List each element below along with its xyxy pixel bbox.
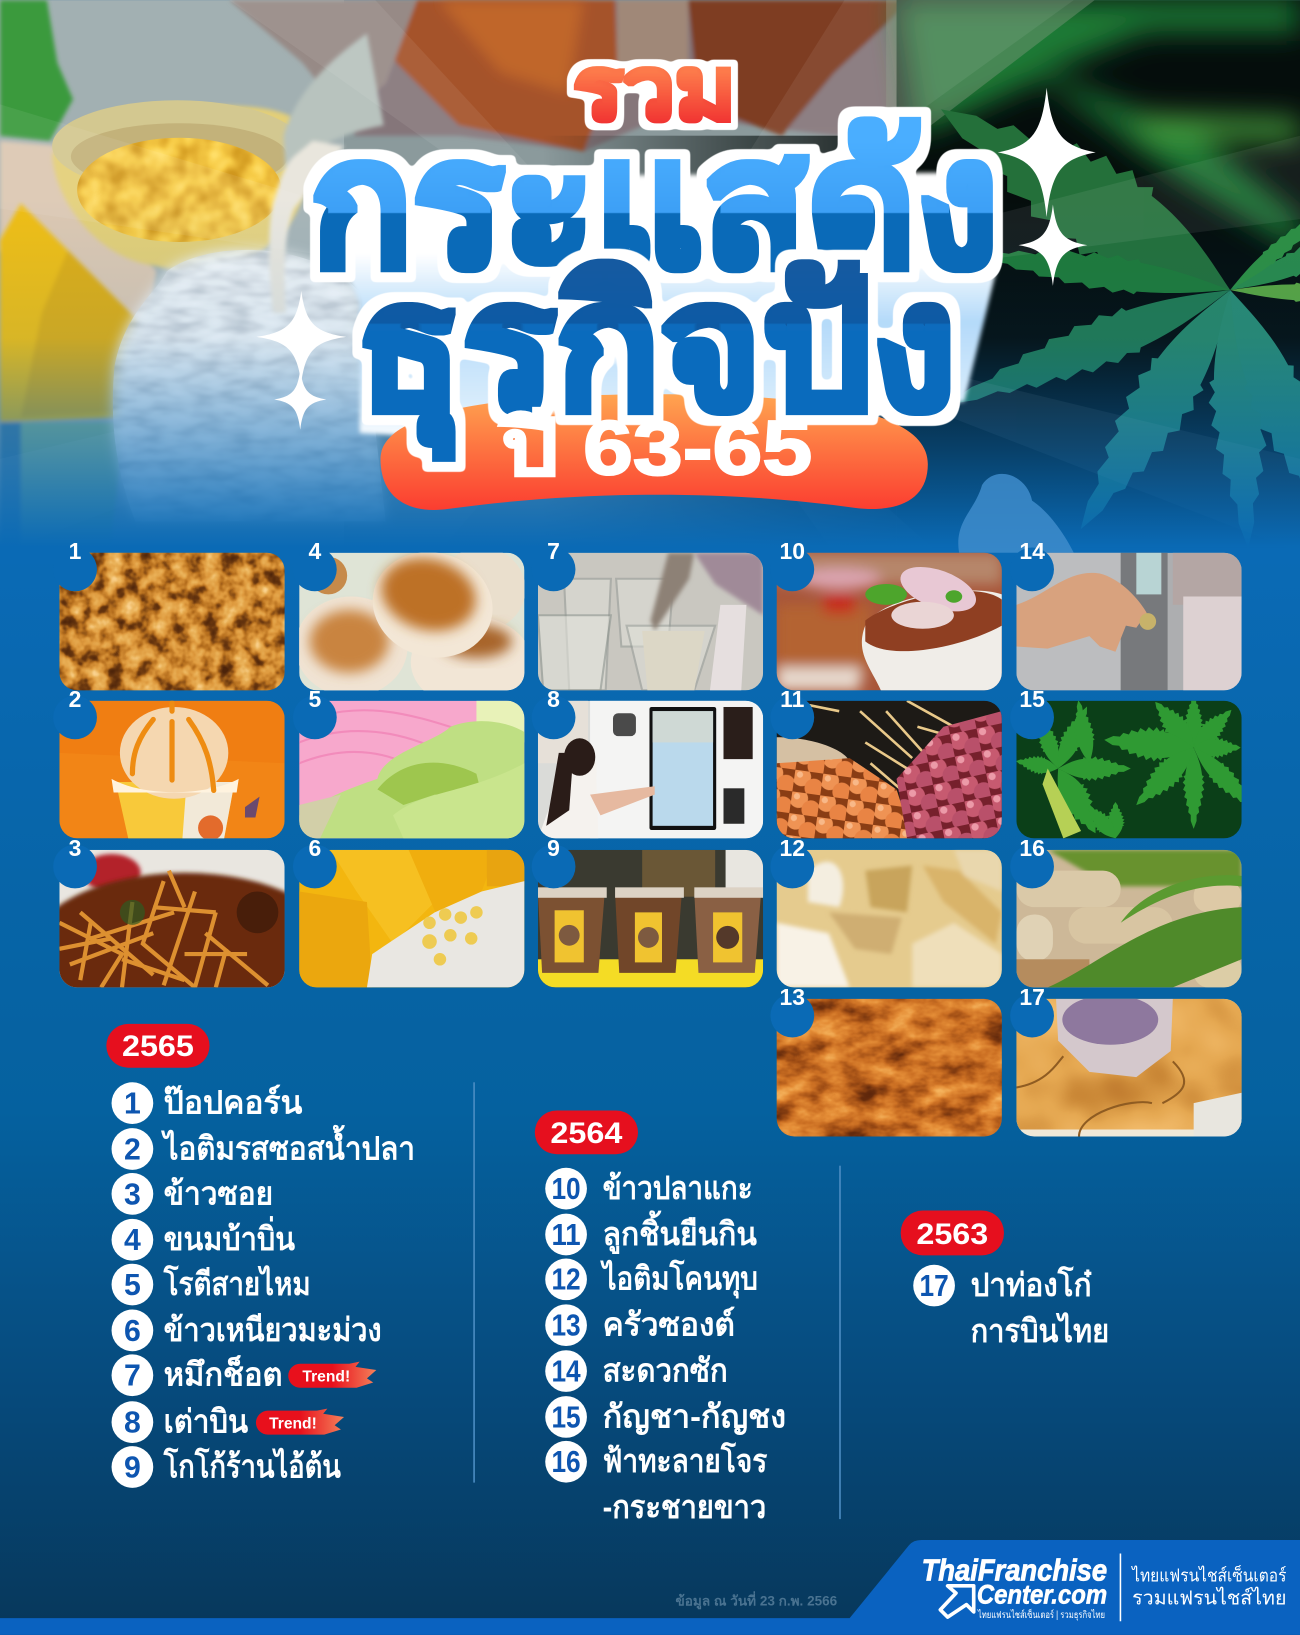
icon: logo arrow [940, 1586, 974, 1617]
item 9: โกโก้ร้านไอ้ต้น [163, 1446, 341, 1484]
item 1: 1 [124, 1088, 141, 1121]
tile 8: tao bin vending machine: 8 [547, 686, 560, 712]
item 16 [545, 1441, 768, 1525]
tile 7: hmuk shot glasses [532, 538, 763, 690]
item 4 [112, 1216, 295, 1261]
tile 12: broken cone ice cream: 12 [780, 835, 805, 861]
trend badge 7 [288, 1362, 376, 1388]
tile 6: mango sticky rice: 6 [308, 835, 321, 861]
item 17 [913, 1265, 1109, 1349]
decorative cloud [958, 474, 1074, 553]
item 11: ลูกชิ้นยืนกิน [603, 1210, 757, 1255]
tile 15: cannabis leaves [1010, 686, 1265, 844]
year pill 2564: 2564 [550, 1118, 623, 1150]
item 17: การบินไทย [971, 1312, 1109, 1349]
cannabis leaf [915, 67, 1300, 550]
photo: green leaf [0, 0, 73, 141]
logo wordmark: Center.com [977, 1579, 1107, 1610]
item 17: 17 [919, 1270, 949, 1303]
item 6 [112, 1310, 382, 1351]
photo: cassava roots [229, 0, 938, 151]
year pill 2564 [535, 1110, 638, 1154]
tile 9: cocoa cups: 9 [547, 835, 560, 861]
photo grid [28, 538, 1265, 1137]
logo wordmark [922, 1555, 1107, 1621]
sparkles [256, 88, 1096, 430]
item 13 [545, 1304, 735, 1346]
item 8: 8 [124, 1407, 141, 1440]
item 3 [112, 1173, 273, 1215]
year pill 2563 [901, 1211, 1004, 1255]
item 3: 3 [124, 1178, 141, 1211]
year pill 2565 [106, 1024, 210, 1068]
item 13: 13 [551, 1310, 581, 1343]
item 17: ปาท่องโก๋ [971, 1265, 1091, 1303]
item 4: ขนมบ้าบิ่น [164, 1216, 295, 1257]
tile 4: rice cakes: 4 [308, 538, 321, 564]
item 6: 6 [124, 1315, 141, 1348]
photo: mango slices [0, 203, 141, 553]
tile 2: ice cream: 2 [69, 686, 81, 712]
item 2: 2 [124, 1133, 141, 1166]
tile 13: croissants: 13 [780, 984, 805, 1010]
list: year 2565 [106, 1024, 415, 1488]
item 14: 14 [551, 1355, 581, 1388]
year pill 2565: 2565 [122, 1031, 194, 1063]
item 15 [545, 1396, 786, 1438]
tile 5: roti sai mai: 5 [308, 686, 321, 712]
item 11: 11 [551, 1219, 581, 1252]
tile 3: khao soi: 3 [69, 835, 81, 861]
tile 14: coin in machine: 14 [1019, 538, 1045, 564]
tile 6: mango sticky rice [293, 835, 524, 987]
item 7: หมึกช็อต [164, 1355, 283, 1393]
logo wordmark: ThaiFranchise [922, 1555, 1107, 1588]
item 7 [112, 1354, 283, 1396]
tile 10: khao pla kae [770, 538, 1002, 690]
item 6: ข้าวเหนียวมะม่วง [164, 1312, 382, 1348]
title backing glow [318, 172, 999, 443]
year pill 2563: 2563 [916, 1219, 988, 1251]
item 11 [545, 1210, 757, 1255]
item 3: ข้าวซอย [164, 1175, 273, 1211]
tile 11: meatballs: 11 [780, 686, 805, 712]
tile 2: ice cream [53, 686, 285, 840]
tile 4: rice cakes [299, 543, 524, 690]
photo: cannabis plant [542, 0, 1300, 553]
item 7: 7 [124, 1360, 141, 1393]
item 13: ครัวซองต์ [603, 1307, 735, 1343]
trend badge 7: Trend! [302, 1368, 350, 1385]
tile 13: croissants [770, 984, 1002, 1137]
tile 1: popcorn [53, 538, 285, 690]
title: ธุรกิจปัง: ธุรกิจปัง [357, 247, 956, 459]
item 10: 10 [551, 1173, 581, 1206]
tile 14: coin in machine [1010, 538, 1242, 690]
title: กระแสดัง: กระแสดัง [311, 104, 999, 304]
title block [311, 40, 999, 510]
item 12: 12 [551, 1264, 581, 1297]
item 5 [112, 1264, 311, 1305]
item 9: 9 [124, 1451, 141, 1484]
item 14: สะดวกซัก [603, 1352, 728, 1388]
item 9 [112, 1446, 341, 1488]
photo: sticky rice [104, 240, 396, 532]
footer brand bar [0, 1540, 1300, 1635]
tile 5: roti sai mai [293, 686, 524, 838]
footer tagline [1130, 1565, 1286, 1610]
photo: bowl of mung beans [52, 100, 304, 271]
item 2 [112, 1124, 415, 1170]
item 12 [545, 1258, 758, 1300]
list: year 2564 [535, 1110, 786, 1525]
list: year 2563 [901, 1211, 1109, 1349]
item 15: 15 [551, 1401, 581, 1434]
trend badge 8: Trend! [269, 1415, 317, 1432]
date pill [381, 394, 928, 510]
item 12: ไอติมโคนทุบ [600, 1259, 758, 1300]
item 5: โรตีสายไหม [163, 1264, 311, 1302]
item 10 [545, 1168, 753, 1209]
item 14 [545, 1350, 728, 1392]
item 16: ฟ้าทะลายโจร [603, 1441, 768, 1479]
tile 16: herbal capsules: 16 [1019, 835, 1045, 861]
tile 12: broken cone ice cream [770, 835, 1002, 987]
item 10: ข้าวปลาแกะ [603, 1170, 753, 1206]
pill text: ปี 63-65: ปี 63-65 [498, 406, 812, 492]
tile 3: khao soi [54, 840, 285, 988]
item 5: 5 [124, 1269, 141, 1302]
tile 8: tao bin vending machine [532, 686, 763, 838]
item 1 [112, 1082, 302, 1124]
logo wordmark: ไทยแฟรนไชส์เซ็นเตอร์ | รวมธุรกิจไทย [977, 1607, 1105, 1621]
item 15: กัญชา-กัญชง [603, 1398, 786, 1435]
tile 16: herbal capsules [1010, 835, 1242, 987]
footer tagline: รวมแฟรนไชส์ไทย [1132, 1587, 1286, 1610]
tile 17: pa tong ko with taro dip [1010, 984, 1242, 1137]
tile 1: popcorn: 1 [69, 538, 82, 564]
tile 9: cocoa cups [532, 835, 763, 987]
tile 7: hmuk shot glasses: 7 [547, 538, 560, 564]
hero photo collage [0, 0, 1300, 558]
item 8 [112, 1401, 248, 1443]
item 16: 16 [551, 1446, 581, 1479]
overlay: light rays [0, 0, 1300, 553]
item 8: เต่าบิน [164, 1404, 248, 1440]
photo: coconut milk [269, 34, 384, 313]
tile 15: cannabis leaves: 15 [1019, 686, 1045, 712]
tile 11: meatballs [770, 686, 1002, 838]
title: รวม: รวม [573, 40, 736, 138]
overlay: blue fade [0, 198, 1300, 547]
item 2: ไอติมรสซอสน้ำปลา [161, 1124, 415, 1166]
item 1: ป๊อปคอร์น [164, 1085, 302, 1121]
data date note: ข้อมูล ณ วันที่ 23 ก.พ. 2566 [676, 1591, 838, 1610]
photo: plate [0, 141, 156, 334]
tile 10: khao pla kae: 10 [780, 538, 805, 564]
tile 17: pa tong ko with taro dip: 17 [1019, 984, 1045, 1010]
item 4: 4 [124, 1224, 141, 1257]
trend badge 8 [256, 1409, 344, 1435]
item 16: -กระชายขาว [603, 1489, 766, 1525]
